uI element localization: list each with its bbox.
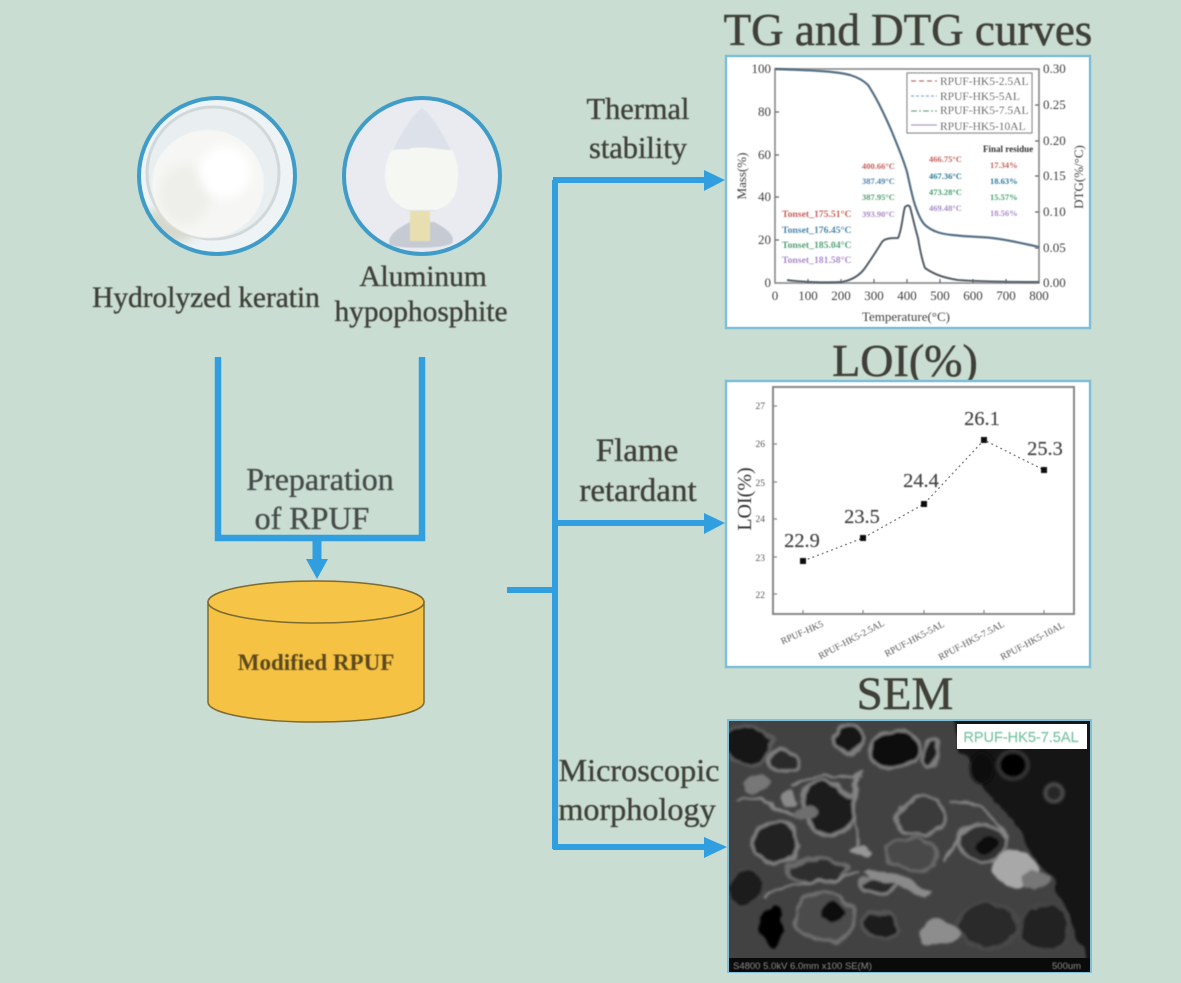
dotted line series [803,440,1044,561]
plot frame [773,387,1074,614]
axis tick labels: 60 [758,147,771,162]
sample label [957,724,1087,749]
label: thermal stability: stability [589,131,688,165]
legend: RPUF-HK5-2.5AL [940,76,1028,88]
label: microscopic morphology [558,752,719,827]
annotations: peak temperatures and residue: 15.57% [990,192,1018,202]
y axis ticks: 22 [756,591,765,601]
annotations: peak temperatures and residue: 469.48°C [929,203,962,213]
annotations: peak temperatures and residue: 393.90°C [862,209,895,219]
plot frame [775,69,1039,283]
axis tick labels: 0.20 [1043,133,1066,148]
annotations: peak temperatures and residue: 467.36°C [929,171,962,181]
axis tick labels: 40 [758,189,771,204]
label: flame retardant: retardant [579,473,697,509]
axis tick labels: 200 [831,288,851,303]
y axis title: LOI(%) [734,467,756,531]
axis tick labels: 0.05 [1043,240,1066,255]
label: thermal stability [587,92,689,165]
axis tick labels: 500 [930,288,950,303]
x axis labels: RPUF-HK5-2.5AL [817,619,887,662]
label: flame retardant: Flame [596,433,678,469]
x axis labels [780,619,1067,663]
axis tick labels: Temperature(°C) [862,309,950,324]
data value labels: 26.1 [964,408,1000,430]
legend: RPUF-HK5-10AL [940,121,1026,133]
annotations: peak temperatures and residue: 18.56% [990,208,1018,218]
panel: SEM micrograph [720,715,1091,972]
icon: hydrolyzed keratin powder dish [139,98,295,254]
axis tick labels: Mass(%) [734,153,749,199]
annotations: peak temperatures and residue: Tonset_185.04°C [782,240,851,251]
annotations: peak temperatures and residue: 18.63% [990,176,1018,186]
annotations: peak temperatures and residue: Tonset_175.51°C [782,209,851,220]
axis tick labels: 100 [752,61,771,76]
icon: modified RPUF cylinder [208,581,424,722]
axis tick labels: 600 [963,288,983,303]
axis tick labels: 0.30 [1043,61,1066,76]
axis tick labels: 700 [996,288,1016,303]
x axis labels: RPUF-HK5-5AL [883,620,947,660]
label: aluminum hypophosphite [334,261,508,328]
annotations: peak temperatures and residue: Tonset_181.58°C [782,255,851,266]
label: modified RPUF: Modified RPUF [238,650,394,675]
foam cells [724,726,1069,954]
axis tick labels: 20 [758,232,771,247]
legend: RPUF-HK5-7.5AL [940,105,1028,117]
heading: TG and DTG curves: TG and DTG curves [724,5,1092,55]
axis tick labels: 0 [764,275,771,290]
panel: SEM micrograph: S4800 5.0kV 6.0mm x100 SE(M) [733,961,872,972]
label: aluminum hypophosphite: hypophosphite [334,296,508,328]
heading: LOI(%): LOI(%) [832,335,978,386]
axis tick labels: 0.10 [1043,204,1066,219]
label: microscopic morphology: morphology [558,791,716,827]
x axis labels: RPUF-HK5-10AL [999,621,1067,663]
y axis ticks: 27 [756,402,765,412]
y axis ticks: 26 [756,440,765,450]
legend: RPUF-HK5-5AL [940,91,1020,103]
axis tick labels: 400 [897,288,917,303]
y axis ticks: 24 [756,515,765,525]
axis tick labels: 0.25 [1043,97,1066,112]
legend [907,73,1032,133]
label: aluminum hypophosphite: Aluminum [359,261,487,293]
axis tick labels: 300 [864,288,884,303]
annotations: peak temperatures and residue: Final residue [983,144,1033,154]
panel: LOI chart [726,381,1090,667]
data value labels: 23.5 [844,506,880,528]
y axis ticks: 25 [756,479,765,489]
arrow: preparation funnel to cylinder [218,357,422,579]
data value labels [784,408,1063,552]
scale bar strip [729,958,1090,972]
x axis labels: RPUF-HK5-7.5AL [937,620,1007,663]
y axis ticks: 23 [756,554,765,564]
TG and DTG curves [775,69,1039,282]
annotations: peak temperatures and residue: Tonset_176.45°C [782,225,851,236]
label: microscopic morphology: Microscopic [559,752,719,788]
axis tick labels: 80 [758,104,771,119]
axis tick labels: DTG(%/°C) [1071,145,1086,209]
label: hydrolyzed keratin: Hydrolyzed keratin [92,282,320,314]
icon: aluminum hypophosphite flask [344,98,500,254]
sample label: RPUF-HK5-7.5AL [963,730,1079,746]
label: preparation of RPUF [246,461,394,536]
axis tick labels: 0.00 [1043,275,1066,290]
panel: SEM micrograph: 500um [1052,961,1081,972]
label: flame retardant [579,433,697,509]
axis tick labels [734,61,1086,324]
x axis labels: RPUF-HK5 [780,620,825,647]
annotations: peak temperatures and residue: 387.95°C [862,192,895,202]
data value labels: 24.4 [903,470,939,492]
annotations: peak temperatures and residue: 17.34% [990,160,1018,170]
data points [800,437,1047,564]
label: thermal stability: Thermal [587,92,689,126]
arrow: branching output arrows [507,170,727,858]
dark background holes [970,751,1063,802]
annotations: peak temperatures and residue: 473.28°C [929,187,962,197]
data value labels: 25.3 [1027,438,1063,460]
data value labels: 22.9 [784,530,820,552]
annotations: peak temperatures and residue: 400.66°C [862,161,895,171]
y axis ticks [756,402,765,601]
foam body [720,715,1085,965]
axis tick labels: 0 [772,288,778,303]
annotations: peak temperatures and residue: 387.49°C [862,176,895,186]
annotations: peak temperatures and residue [782,144,1033,266]
heading: SEM: SEM [857,668,953,720]
annotations: peak temperatures and residue: 466.75°C [929,154,962,164]
axis tick labels: 800 [1029,288,1049,303]
axis tick labels: 100 [798,288,818,303]
panel: TG and DTG chart [726,56,1090,328]
label: preparation of RPUF: of RPUF [255,500,369,536]
label: preparation of RPUF: Preparation [246,461,394,497]
axis tick labels: 0.15 [1043,168,1066,183]
